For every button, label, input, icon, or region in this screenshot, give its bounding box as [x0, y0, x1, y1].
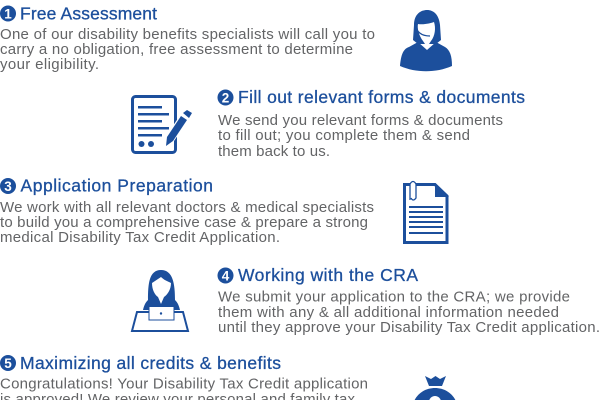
number badge 3: 3 — [4, 179, 12, 194]
text block: step 4 description: until they approve your Disability Tax Credit application. — [218, 319, 600, 336]
step 2: fill out forms — [218, 87, 525, 160]
heading: maximizing all credits and benefits: Maximizing all credits & benefits — [20, 353, 281, 373]
text block: step 1 description: One of our disability benefits specialists will call you to — [0, 26, 375, 43]
heading: working with the cra: Working with the CRA — [238, 265, 418, 285]
number badge 2 — [218, 90, 234, 106]
text block: step 5 description: Congratulations! Your Disability Tax Credit application — [0, 376, 368, 392]
heading: free assessment: Free Assessment — [20, 4, 157, 24]
icon: support agent with headset — [400, 10, 452, 71]
text block: step 2 description: We send you relevant forms & documents — [218, 112, 503, 129]
text block: step 3 description — [0, 199, 374, 246]
text block: step 1 description: your eligibility. — [0, 56, 99, 73]
text block: step 2 description: to fill out; you complete them & send — [218, 127, 470, 144]
step 1: free assessment — [0, 4, 375, 73]
number badge 5 — [0, 355, 16, 371]
text block: step 1 description — [0, 26, 375, 73]
text block: step 3 description: to build you a comprehensive case & prepare a strong — [0, 214, 368, 231]
step 3: application preparation — [0, 176, 374, 246]
text block: step 3 description: We work with all relevant doctors & medical specialists — [0, 199, 374, 216]
icon: woman working at laptop — [132, 270, 188, 331]
text block: step 4 description: them with any & all additional information needed — [218, 304, 559, 321]
text block: step 5 description — [0, 376, 368, 400]
text block: step 1 description: carry a no obligation, free assessment to determine — [0, 41, 353, 58]
step 5: maximizing credits and benefits — [0, 353, 368, 400]
text block: step 3 description: medical Disability Tax Credit Application. — [0, 229, 280, 246]
number badge 2: 2 — [222, 90, 229, 106]
icon: form with pencil — [132, 96, 192, 152]
number badge 3 — [0, 178, 16, 194]
heading: fill out relevant forms and documents: Fill out relevant forms & documents — [238, 87, 525, 107]
text block: step 2 description — [218, 112, 503, 160]
number badge 5: 5 — [4, 356, 12, 371]
icon: money bag — [413, 376, 457, 400]
step 4: working with the cra — [218, 265, 600, 336]
heading: application preparation: Application Preparation — [20, 176, 213, 196]
number badge 4 — [218, 268, 234, 284]
number badge 1 — [0, 6, 16, 22]
text block: step 4 description — [218, 288, 600, 336]
icon: document with paperclip — [404, 182, 449, 242]
text block: step 2 description: them back to us. — [218, 143, 330, 160]
number badge 4: 4 — [222, 268, 230, 284]
number badge 1: 1 — [4, 6, 12, 22]
text block: step 4 description: We submit your application to the CRA; we provide — [218, 288, 570, 306]
